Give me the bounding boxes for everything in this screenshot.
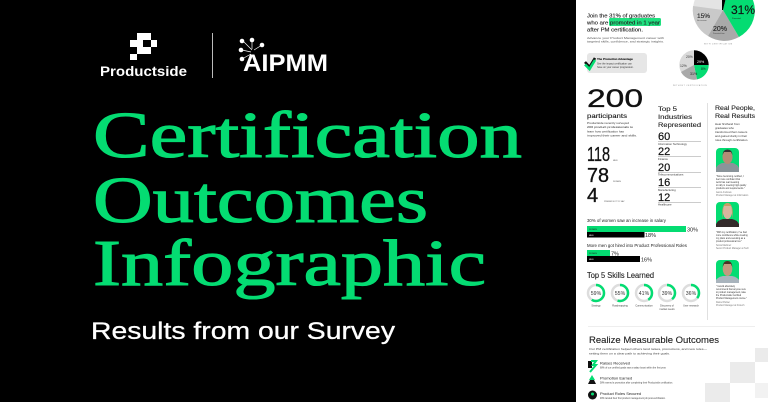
- quote 2: more confidence while creating: [716, 234, 748, 237]
- quote 2: [716, 231, 750, 250]
- logo: AIPMM: AIPMM: [243, 50, 328, 77]
- portrait 2: [716, 202, 739, 227]
- pie chart: with certification: 15%: [697, 13, 710, 20]
- bar chart: hired into product roles: [587, 243, 687, 264]
- heading: realize measurable outcomes: Realize Measurable Outcomes: [589, 335, 720, 345]
- logo: Productside: [100, 33, 188, 79]
- outcome: raises received: Raises Received: [600, 360, 630, 366]
- top 5 skills: Discovery of: [660, 304, 674, 308]
- outcome: promotion earned: [588, 375, 673, 384]
- quote 2: Sonia Martinez: [716, 244, 732, 247]
- intro text: who are promoted in 1 year: [586, 20, 660, 26]
- testimonials column: graduates who: [715, 126, 734, 130]
- callout: the promotion advantage: See the impact certification can: [597, 62, 632, 66]
- intro text: after PM certification.: [587, 28, 643, 34]
- stat: gender counts: 118: [587, 144, 610, 166]
- logo: Productside: Productside: [100, 64, 188, 79]
- top 5 industries: Top 5: [658, 106, 677, 113]
- title: [93, 99, 522, 300]
- top 5 skills: 36%: [686, 291, 697, 297]
- quote 2: "With my certification, I’ve had: [716, 231, 747, 234]
- quote 3: Product Management course.": [716, 297, 747, 300]
- quote 3: Daniel Parker: [716, 301, 730, 304]
- pie chart: without certification: WITHOUT CERTIFICATION: [673, 84, 707, 87]
- stat: 200 participants: 200 product professionals to: [587, 125, 633, 129]
- stat: gender counts: PREFER NOT TO SAY: [604, 200, 625, 203]
- callout: the promotion advantage: have on your career progression.: [597, 66, 634, 69]
- callout: the promotion advantage: [585, 53, 647, 73]
- quote 1: products and requirements.": [716, 187, 745, 190]
- top 5 industries: Information Technology: [658, 142, 687, 146]
- pie chart: with certification: No increase: [697, 20, 707, 22]
- title: Certification: [93, 99, 522, 172]
- testimonials column: Hear firsthand from: [715, 122, 740, 126]
- top 5 skills: 55%: [615, 291, 626, 297]
- top 5 industries: Healthcare: [658, 202, 672, 206]
- pie chart: with certification: 31%: [731, 3, 755, 17]
- stat: gender counts: 4: [587, 185, 598, 207]
- top 5 skills: Strategy: [591, 304, 601, 308]
- pie chart: without certification: 12%: [680, 64, 687, 68]
- top 5 industries: 22: [658, 146, 670, 158]
- title: Infographic: [93, 227, 486, 300]
- stat: gender counts: MEN: [613, 160, 618, 162]
- pie chart: without certification: 20%: [686, 55, 693, 59]
- quote 3: recommend that anyone new: [716, 288, 746, 291]
- outcome: raises received: [588, 360, 666, 372]
- quote 1: [716, 175, 749, 197]
- testimonials column: [715, 105, 756, 307]
- intro text: Advance your Product Management career with: [587, 36, 665, 40]
- intro text: Join the 31% of graduates: [587, 14, 655, 20]
- testimonials column: Real Results: [715, 113, 756, 120]
- section description: [589, 347, 707, 356]
- top 5 skills: Roadmapping: [612, 304, 628, 308]
- outcome: promotion earned: 58% earned a promotion after completing their Productside certification.: [600, 382, 673, 384]
- top 5 industries: [658, 106, 701, 206]
- bar chart: hired into product roles: More men got hired into Product Professional Roles: [587, 243, 687, 248]
- portrait 3: [716, 260, 739, 283]
- quote 1: Aaron Andrews: [716, 191, 732, 194]
- icon: check mark: [585, 58, 595, 69]
- panel: infographic preview: [576, 0, 768, 402]
- bar chart: hired into product roles: MEN: [589, 259, 594, 261]
- top 5 industries: 60: [658, 131, 670, 143]
- stat: 200 participants: 200: [587, 85, 643, 113]
- top 5 skills: 39%: [662, 291, 673, 297]
- pie chart: with certification: WITH CERTIFICATION: [704, 42, 733, 46]
- portrait 1: [716, 148, 739, 172]
- top 5 industries: Industries: [658, 114, 693, 121]
- outcome: promotion earned: Promotion Earned: [600, 376, 632, 380]
- callout: the promotion advantage: The Promotion Advantage: [597, 57, 633, 61]
- stat: 200 participants: learn how certification has: [587, 129, 625, 133]
- pie chart: with certification: 20%: [713, 26, 727, 33]
- top 5 skills: 41%: [639, 291, 650, 297]
- intro text: targeted skills, confidence, and strategic insights.: [587, 40, 664, 44]
- bar chart: hired into product roles: 16%: [641, 258, 652, 264]
- quote 1: "Since becoming certified, I: [716, 175, 744, 178]
- logo divider: [212, 33, 213, 78]
- top 5 industries: Represented: [658, 122, 701, 129]
- quote 2: product professional too.": [716, 240, 742, 243]
- bar chart: salary increase: 30% of women saw an increase in salary: [587, 218, 667, 223]
- stat: 200 participants: [587, 85, 643, 138]
- top 5 skills: [587, 271, 699, 311]
- quote 1: to rally in meeting high quality: [716, 184, 747, 187]
- top 5 industries: 16: [658, 177, 670, 189]
- pie chart: with certification: Promoted later: [713, 32, 725, 35]
- top 5 skills: Top 5 Skills Learned: [587, 271, 654, 280]
- stat: 200 participants: Productside recently surveyed: [587, 121, 629, 125]
- top 5 skills: 59%: [591, 291, 602, 297]
- pie chart: without certification: 31%: [690, 72, 698, 76]
- section description: Our PM certification helped others land raises, promotions, and new roles—: [589, 347, 707, 351]
- quote 2: Senior Product Manager at Tech: [716, 247, 750, 250]
- top 5 skills: Communication: [635, 304, 653, 308]
- outcome: raises received: 68% of our certified grads saw a salary boost within the first year.: [600, 366, 666, 370]
- title: Outcomes: [93, 164, 428, 237]
- bar chart: salary increase: [587, 218, 698, 239]
- top 5 industries: 20: [658, 162, 670, 174]
- quote 3: [716, 285, 747, 307]
- column divider: [706, 103, 709, 320]
- outcome: product roles secured: Product Roles Secured: [600, 391, 641, 396]
- pie chart: with certification: Promoted: [732, 17, 741, 20]
- testimonials column: Real People,: [715, 105, 755, 112]
- checker decoration: [705, 348, 768, 402]
- quote 1: Product Manager at Information: [716, 194, 749, 197]
- stat: gender counts: [587, 144, 625, 207]
- quote 3: Product Manager at Fintech: [716, 304, 745, 307]
- pie chart: without certification: 29%: [697, 60, 705, 64]
- bar chart: salary increase: 30%: [687, 228, 698, 234]
- stat: 200 participants: participants: [587, 113, 627, 120]
- quote 2: my plans and executing as a: [716, 237, 746, 240]
- testimonials column: roles through certification.: [715, 138, 748, 142]
- outcome: product roles secured: [588, 390, 666, 400]
- testimonials column: and gained clarity in their: [715, 134, 747, 138]
- testimonials column: transformed their careers: [715, 130, 748, 134]
- quote 3: to product management, take: [716, 291, 747, 294]
- bar chart: hired into product roles: WOMEN: [589, 253, 597, 255]
- bar chart: salary increase: MEN: [589, 235, 594, 237]
- outcome: product roles secured: 48% landed their first product management job post-certification.: [600, 397, 666, 400]
- bar chart: hired into product roles: 7%: [611, 252, 619, 258]
- pie chart: with certification: [693, 0, 755, 46]
- subtitle: Results from our Survey: [91, 318, 396, 345]
- stat: gender counts: WOMEN: [613, 181, 621, 183]
- section description: setting them on a clear path to achieving their goals.: [589, 352, 670, 356]
- top 5 skills: market needs: [659, 308, 675, 311]
- top 5 industries: Telecommunications: [658, 172, 684, 176]
- pie chart: without certification: [673, 50, 709, 87]
- top 5 industries: Finance: [658, 157, 668, 161]
- stat: 200 participants: improved their career and skills.: [587, 134, 637, 138]
- stat: gender counts: 78: [587, 165, 609, 187]
- intro text: [586, 14, 665, 44]
- top 5 skills: User research: [683, 304, 699, 308]
- pie chart: without certification: 8%: [701, 67, 706, 71]
- quote 1: feel more confident that: [716, 178, 740, 181]
- top 5 industries: 12: [658, 192, 670, 204]
- section divider: [588, 325, 755, 328]
- quote 3: "I would absolutely: [716, 285, 736, 288]
- top 5 industries: Manufacturing: [658, 188, 676, 192]
- quote 3: the Productside Certified: [716, 294, 742, 297]
- logo: AIPMM: [239, 38, 328, 77]
- bar chart: salary increase: WOMEN: [589, 229, 597, 231]
- quote 1: work has real meaning: [716, 181, 740, 184]
- bar chart: salary increase: 18%: [645, 233, 656, 239]
